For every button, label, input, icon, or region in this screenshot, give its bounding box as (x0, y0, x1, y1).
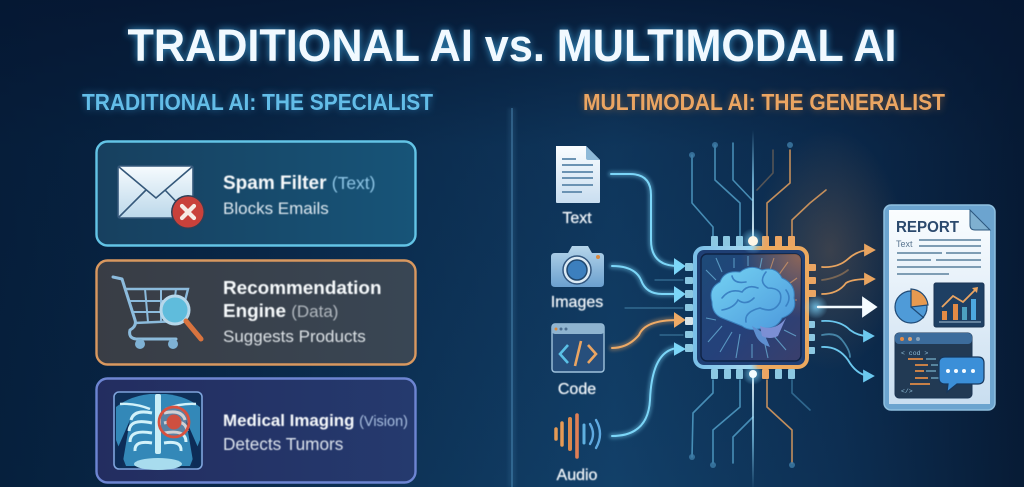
heading: traditional AI: TRADITIONAL AI: THE SPECIALIST (82, 89, 433, 115)
text: spam filter: Blocks Emails (223, 199, 329, 218)
chip radial lines (706, 256, 796, 358)
pie chart (895, 289, 928, 323)
heading: multimodal AI: MULTIMODAL AI: THE GENERALIST (583, 89, 945, 115)
panel: medical imaging (96, 378, 416, 482)
icon: shopping cart with magnifier (113, 277, 201, 349)
input: audio waveform: Audio (557, 467, 598, 484)
code window (895, 333, 972, 398)
report text lines (896, 239, 981, 274)
text: recommendation engine: Engine (Data) (223, 301, 338, 322)
input: text document: Text (562, 210, 592, 227)
report text lines: Text (896, 239, 913, 249)
input: images camera: Images (551, 294, 603, 311)
report heading: REPORT (896, 219, 960, 236)
input: code window (552, 324, 604, 398)
panel: spam filter (96, 142, 416, 246)
text: recommendation engine (223, 278, 382, 346)
line and bar chart (934, 283, 984, 327)
heading: traditional AI: TRADITIONAL AI: THE SPECIALIST (82, 89, 433, 115)
code window: < cod > (901, 350, 928, 357)
icon: chest x-ray (114, 392, 202, 470)
icon: brain (711, 267, 795, 347)
chip pins (685, 236, 816, 379)
text: medical imaging: Detects Tumors (223, 434, 343, 454)
title: TRADITIONAL AI vs. MULTIMODAL AI (128, 20, 896, 71)
heading: multimodal AI: MULTIMODAL AI: THE GENERALIST (583, 89, 945, 115)
text: medical imaging: Medical Imaging (Vision) (223, 411, 408, 430)
text: recommendation engine: Recommendation (223, 278, 382, 299)
input: images camera (551, 246, 604, 311)
input: audio waveform (556, 415, 600, 484)
arrows: inputs to chip (611, 174, 684, 436)
circuit traces: top and bottom of chip (689, 130, 826, 487)
input: code window: Code (558, 381, 596, 398)
output report (884, 205, 995, 410)
text: spam filter (223, 173, 376, 218)
processor chip with brain (685, 236, 816, 379)
title: TRADITIONAL AI vs. MULTIMODAL AI (128, 20, 896, 71)
icon: envelope with blocked badge (118, 166, 205, 229)
chat bubble (939, 357, 984, 392)
code window: </> (901, 388, 913, 395)
text: medical imaging (223, 411, 408, 454)
text: recommendation engine: Suggests Products (223, 327, 366, 346)
input: text document (556, 146, 600, 227)
panel: recommendation engine (96, 260, 416, 364)
text: spam filter: Spam Filter (Text) (223, 173, 376, 194)
bright node glow on chip (740, 228, 828, 385)
arrows: chip to report (818, 245, 876, 381)
